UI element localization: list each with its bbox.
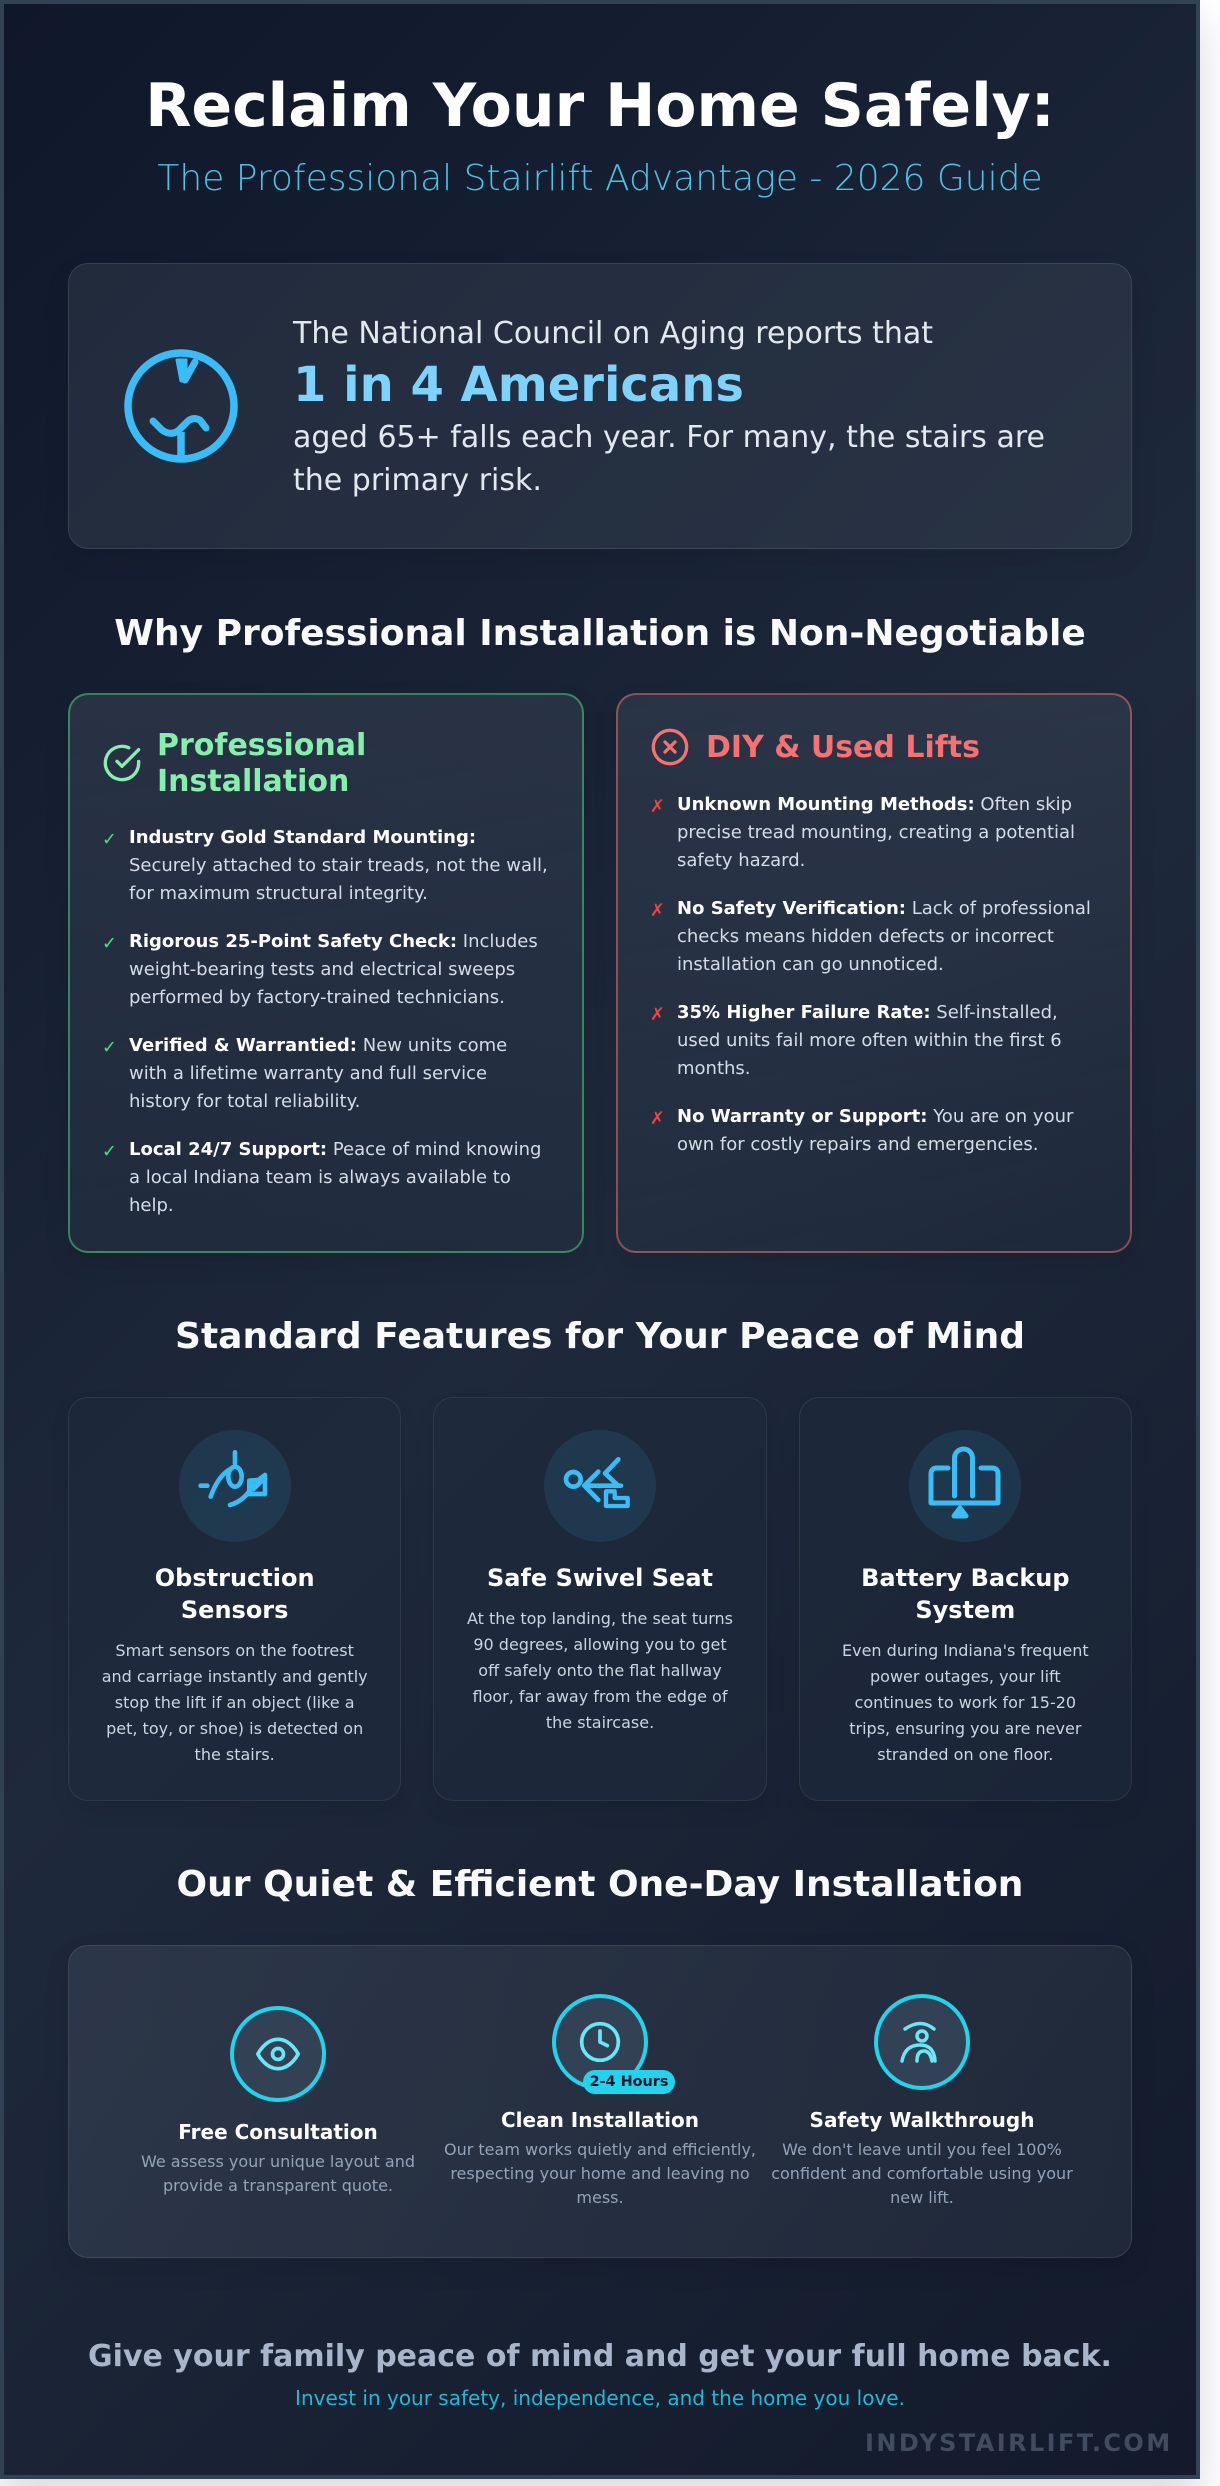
heading: professional installation xyxy=(157,728,366,799)
icon: swivel seat xyxy=(544,1430,656,1542)
list: DIY risks: installation can go unnoticed. xyxy=(677,954,944,975)
feature title: System xyxy=(915,1596,1015,1624)
step description xyxy=(444,2140,756,2207)
step title: Clean Installation xyxy=(501,2108,699,2132)
list: professional benefits: with a lifetime warranty and full service xyxy=(129,1062,487,1084)
step description xyxy=(141,2152,415,2195)
feature title: Battery Backup xyxy=(861,1564,1070,1592)
icon: person with safety arc xyxy=(900,2022,937,2063)
panel: battery backup xyxy=(799,1397,1132,1801)
step ring: walkthrough xyxy=(874,1994,970,2090)
panel: installation steps xyxy=(68,1945,1132,2258)
icon: eye xyxy=(256,2038,300,2070)
heading: one-day installation: Our Quiet & Efficient One-Day Installation xyxy=(177,1864,1023,1905)
step description: mess. xyxy=(576,2188,624,2207)
list: professional benefits: history for total reliability. xyxy=(129,1090,360,1112)
feature description: off safely onto the flat hallway xyxy=(478,1661,722,1680)
panel: safe swivel seat xyxy=(433,1397,767,1801)
feature title: Sensors xyxy=(181,1596,288,1624)
list: DIY risks: used units fail more often within the first 6 xyxy=(677,1030,1062,1051)
call to action subline: Invest in your safety, independence, and the home you love. xyxy=(295,2386,905,2410)
badge: 2-4 hours: 2-4 Hours xyxy=(590,2074,668,2090)
feature description: and carriage instantly and gently xyxy=(102,1667,368,1686)
list: DIY risks: own for costly repairs and emergencies. xyxy=(677,1134,1038,1155)
list: professional benefits: Local 24/7 Support: Peace of mind knowing xyxy=(129,1138,541,1160)
list: DIY risks: No Safety Verification: Lack of professional xyxy=(677,898,1091,919)
heading: professional installation: Installation xyxy=(157,764,349,799)
hero text: risk xyxy=(293,420,1045,498)
step description: Our team works quietly and efficiently, xyxy=(444,2140,756,2159)
feature description xyxy=(842,1641,1089,1764)
panel: professional installation xyxy=(68,693,584,1253)
feature description: At the top landing, the seat turns xyxy=(467,1609,733,1628)
text: ✓ xyxy=(102,1142,117,1162)
text: ✓ xyxy=(102,1038,117,1058)
panel: DIY and used lifts xyxy=(616,693,1132,1253)
glyph: sensor xyxy=(198,1450,268,1508)
feature description: the staircase. xyxy=(546,1713,654,1732)
list: professional benefits: Rigorous 25-Point Safety Check: Includes xyxy=(129,930,538,952)
list: professional benefits: Securely attached to stair treads, not the wall, xyxy=(129,854,548,876)
icon: obstruction sensors xyxy=(179,1430,291,1542)
feature description: 90 degrees, allowing you to get xyxy=(473,1635,727,1654)
call to action headline: Give your family peace of mind and get your full home back. xyxy=(88,2339,1112,2374)
icon: x circle xyxy=(652,728,688,766)
glyph: swivel xyxy=(564,1457,630,1508)
list: DIY risks: precise tread mounting, creating a potential xyxy=(677,822,1075,843)
list: DIY risks: safety hazard. xyxy=(677,850,805,871)
title: Reclaim Your Home Safely: xyxy=(145,71,1055,141)
watermark: INDYSTAIRLIFT.COM xyxy=(865,2429,1173,2457)
step ring: consultation xyxy=(230,2006,326,2102)
list: professional benefits: weight-bearing tests and electrical sweeps xyxy=(129,958,515,980)
feature description: pet, toy, or shoe) is detected on xyxy=(106,1719,363,1738)
feature description: stop the lift if an object (like a xyxy=(115,1693,355,1712)
feature description: Smart sensors on the footrest xyxy=(115,1641,354,1660)
feature title: Obstruction xyxy=(155,1564,315,1592)
text: ✗ xyxy=(650,901,665,921)
feature title xyxy=(861,1564,1070,1624)
feature description: trips, ensuring you are never xyxy=(849,1719,1081,1738)
feature description xyxy=(102,1641,368,1764)
text: ✗ xyxy=(650,1109,665,1129)
heading: DIY and used lifts: DIY & Used Lifts xyxy=(706,730,980,765)
list: professional benefits: performed by factory-trained technicians. xyxy=(129,986,505,1008)
icon: clock xyxy=(580,2022,620,2062)
feature description: power outages, your lift xyxy=(870,1667,1061,1686)
panel: statistic hero xyxy=(68,263,1132,549)
hero text: risk: the primary risk. xyxy=(293,462,542,498)
heading: standard features: Standard Features for Your Peace of Mind xyxy=(175,1316,1025,1357)
list: DIY risks xyxy=(650,794,1091,1155)
feature description: Even during Indiana's frequent xyxy=(842,1641,1089,1660)
list: DIY risks: No Warranty or Support: You are on your xyxy=(677,1106,1073,1127)
list: DIY risks: months. xyxy=(677,1058,751,1079)
text: ✓ xyxy=(102,830,117,850)
feature description: stranded on one floor. xyxy=(877,1745,1053,1764)
list: professional benefits xyxy=(102,826,548,1216)
icon: battery backup xyxy=(909,1430,1021,1542)
step title: Safety Walkthrough xyxy=(810,2108,1034,2132)
hero statistic: 1 in 4 Americans xyxy=(293,357,744,413)
list: professional benefits: Industry Gold Standard Mounting: xyxy=(129,826,476,848)
step description: We don't leave until you feel 100% xyxy=(782,2140,1062,2159)
panel: obstruction sensors xyxy=(68,1397,401,1801)
badge: 2-4 hours xyxy=(583,2070,675,2094)
text: ✗ xyxy=(650,1005,665,1025)
feature description: floor, far away from the edge of xyxy=(473,1687,727,1706)
icon: fall warning dial xyxy=(124,349,238,463)
feature description: continues to work for 15-20 xyxy=(855,1693,1076,1712)
icon: check circle xyxy=(104,744,140,782)
list: DIY risks: checks means hidden defects or incorrect xyxy=(677,926,1054,947)
text: ✗ xyxy=(650,797,665,817)
step description xyxy=(771,2140,1073,2207)
step description: provide a transparent quote. xyxy=(163,2176,393,2195)
list: DIY risks: 35% Higher Failure Rate: Self-installed, xyxy=(677,1002,1058,1023)
feature description xyxy=(467,1609,733,1732)
step description: new lift. xyxy=(890,2188,954,2207)
feature title xyxy=(155,1564,315,1624)
feature title: Safe Swivel Seat xyxy=(487,1564,713,1592)
feature description: the stairs. xyxy=(195,1745,275,1764)
step ring: installation xyxy=(552,1994,648,2090)
step description: respecting your home and leaving no xyxy=(450,2164,750,2183)
list: professional benefits: help. xyxy=(129,1194,174,1216)
text: ✓ xyxy=(102,934,117,954)
glyph: battery xyxy=(928,1446,1000,1518)
list: DIY risks: Unknown Mounting Methods: Often skip xyxy=(677,794,1072,815)
step description: We assess your unique layout and xyxy=(141,2152,415,2171)
step title: Free Consultation xyxy=(178,2120,378,2144)
hero text: intro: The National Council on Aging reports that xyxy=(293,316,933,350)
heading: professional installation: Professional xyxy=(157,728,366,763)
list: professional benefits: for maximum structural integrity. xyxy=(129,882,428,904)
list: professional benefits: Verified & Warrantied: New units come xyxy=(129,1034,507,1056)
hero text: risk: aged 65+ falls each year. For many, the stairs are xyxy=(293,420,1045,455)
step description: confident and comfortable using your xyxy=(771,2164,1073,2183)
heading: why professional: Why Professional Installation is Non-Negotiable xyxy=(114,613,1086,654)
subtitle: The Professional Stairlift Advantage - 2026 Guide xyxy=(157,158,1043,199)
list: professional benefits: a local Indiana team is always available to xyxy=(129,1166,511,1188)
